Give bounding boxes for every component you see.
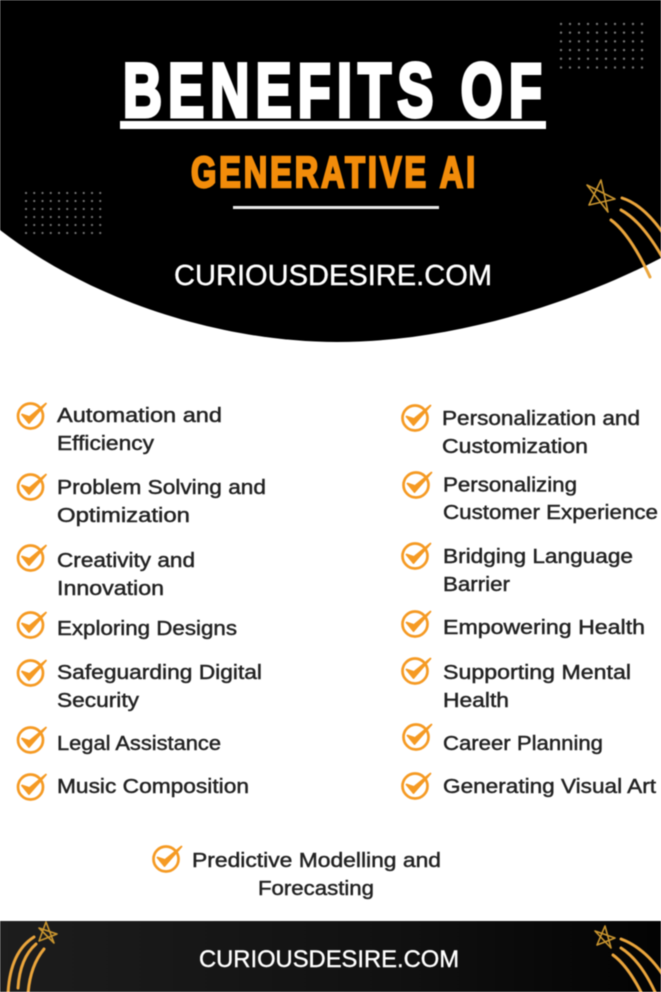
benefit: Supporting Mental Health: [402, 658, 631, 712]
benefit: Legal Assistance: Legal Assistance: [57, 733, 221, 755]
icon: shooting star footer left: [8, 922, 57, 992]
icon: shooting star footer right: [595, 926, 661, 992]
dot grid: top right: [557, 20, 647, 72]
benefit: Problem Solving and Optimization: [18, 474, 266, 527]
benefit: Generating Visual Art: [402, 774, 656, 798]
benefit: Exploring Designs: Exploring Designs: [57, 618, 237, 640]
benefit: Career Planning: [404, 724, 603, 755]
title: Benefits of: BENEFITS OF: [123, 47, 542, 133]
benefit: Creativity and Innovation: [18, 546, 195, 600]
benefit: Problem Solving and Optimization: Optimization: [57, 505, 190, 527]
benefit: Personalization and Customization: Customization: [442, 436, 588, 458]
benefit: Creativity and Innovation: Innovation: [57, 578, 164, 600]
benefit: Personalizing Customer Experience: [404, 472, 658, 524]
benefit: Music Composition: [18, 774, 249, 800]
benefit: Legal Assistance: [18, 728, 221, 755]
benefit: Supporting Mental Health: Health: [443, 690, 509, 712]
footer website text: CURIOUSDESIRE.COM: [199, 946, 459, 973]
header: black curved background: [0, 0, 661, 342]
dot grid: left: [22, 189, 104, 237]
benefit: Empowering Health: Empowering Health: [443, 617, 645, 639]
benefit: Music Composition: Music Composition: [57, 776, 249, 798]
benefit: Bridging Language Barrier: [402, 544, 633, 596]
benefit: Predictive Modelling and Forecasting: Predictive Modelling and: [192, 850, 441, 872]
header website text: CURIOUSDESIRE.COM: [174, 260, 492, 292]
benefit: Safeguarding Digital Security: Security: [57, 690, 139, 712]
subtitle underline: [233, 206, 439, 209]
benefit: Bridging Language Barrier: Bridging Language: [443, 546, 633, 568]
benefit: Supporting Mental Health: Supporting Mental: [443, 662, 631, 684]
benefit: Personalization and Customization: [402, 406, 640, 458]
benefit: Personalizing Customer Experience: Personalizing: [443, 474, 577, 496]
benefit: Bridging Language Barrier: Barrier: [443, 574, 510, 596]
benefit: Exploring Designs: [18, 612, 237, 640]
benefit: Automation and Efficiency: [18, 404, 222, 455]
benefit: Safeguarding Digital Security: Safeguarding Digital: [57, 662, 262, 684]
benefit: Empowering Health: [402, 612, 645, 639]
benefit: Career Planning: Career Planning: [443, 733, 603, 755]
benefit: Automation and Efficiency: Automation and: [57, 405, 222, 427]
subtitle: Generative AI: GENERATIVE AI: [191, 148, 475, 197]
benefit: Personalizing Customer Experience: Customer Experience: [443, 502, 658, 524]
benefit: Automation and Efficiency: Efficiency: [57, 433, 154, 455]
benefit: Creativity and Innovation: Creativity and: [57, 550, 195, 572]
benefit: Safeguarding Digital Security: [18, 660, 262, 712]
benefit: Generating Visual Art: Generating Visual Art: [443, 776, 656, 798]
benefit: Predictive Modelling and Forecasting: [154, 846, 441, 900]
icon: shooting star top right: [587, 180, 661, 277]
benefit: Problem Solving and Optimization: Problem Solving and: [57, 477, 266, 499]
footer: dark band: [0, 921, 661, 992]
title underline: [120, 121, 546, 129]
benefit: Personalization and Customization: Personalization and: [442, 408, 640, 430]
benefit: Predictive Modelling and Forecasting: Forecasting: [258, 878, 374, 900]
